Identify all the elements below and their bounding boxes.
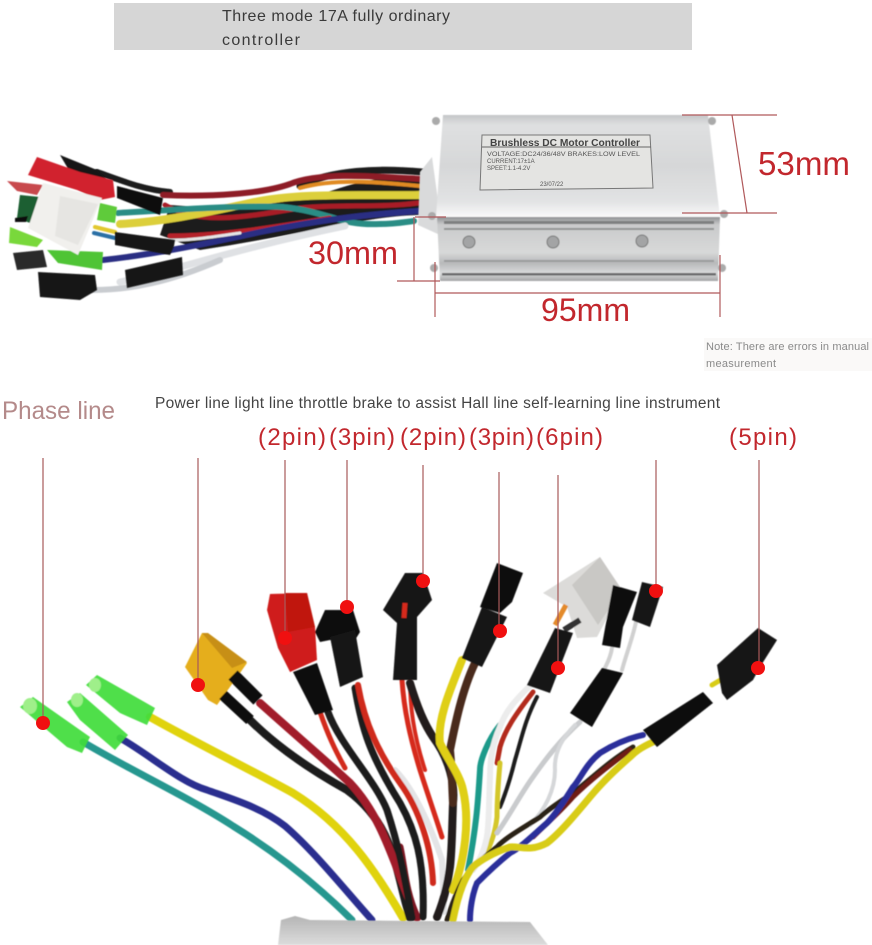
instrument connector: [643, 628, 777, 747]
caption: wire functions: Power line light line throttle brake to assist Hall line self-learning line instrument: [155, 395, 721, 412]
pin count labels: (5pin): [729, 424, 797, 451]
header banner: controller: [222, 32, 301, 49]
self-learning wires: [497, 622, 636, 833]
power connector: [185, 633, 258, 720]
measurement note: [704, 338, 872, 371]
throttle connector: [315, 610, 363, 687]
product label on controller: Brushless DC Motor Controller: [490, 138, 640, 149]
controller base: [278, 916, 548, 945]
pin count labels: (3pin): [469, 424, 534, 451]
measurement note: measurement: [706, 358, 776, 370]
assist wires: [440, 660, 475, 890]
wiring diagram connectors: [20, 557, 777, 945]
dimension: 30mm: [308, 217, 446, 281]
product label on controller: SPEET:1.1-4.2V: [487, 166, 530, 172]
callout dots: [36, 574, 765, 730]
product label on controller: [480, 135, 653, 190]
phase wires: [83, 717, 403, 920]
light connector: [267, 593, 333, 715]
pin count labels: (6pin): [536, 424, 603, 451]
controller box: top photo: [418, 115, 728, 281]
brake wires: [402, 680, 453, 917]
self-learning connectors: [570, 582, 663, 727]
assist connector: [462, 563, 523, 667]
power line wires: [250, 703, 417, 918]
hall connector: [527, 557, 622, 693]
brake connector: [383, 573, 432, 680]
pin count labels: (2pin): [258, 424, 326, 451]
dimension: 30mm: 30mm: [308, 235, 398, 271]
pin count labels: (3pin): [329, 424, 395, 451]
header banner: Three mode 17A fully ordinary: [222, 8, 450, 25]
header banner: [114, 3, 692, 50]
harness connectors: top photo: [7, 155, 183, 300]
callout leader lines: [43, 458, 759, 722]
product label on controller: VOLTAGE:DC24/36/48V BRAKES:LOW LEVEL: [487, 152, 641, 158]
wiring harness: top photo: [92, 170, 422, 290]
dimension: 53mm: [682, 115, 850, 213]
instrument wires: [447, 678, 724, 920]
heading: phase line: Phase line: [2, 397, 115, 425]
hall wires: [468, 683, 537, 870]
product label on controller: 23/07/22: [540, 182, 564, 188]
light line wires: [320, 712, 412, 918]
throttle wires: [355, 685, 444, 917]
phase connectors: [20, 675, 155, 753]
pin count labels: (2pin): [400, 424, 466, 451]
pin count labels: [258, 424, 797, 451]
measurement note: Note: There are errors in manual: [706, 341, 869, 353]
dimension: 95mm: 95mm: [541, 292, 630, 328]
wiring diagram wires: [83, 622, 724, 920]
product label on controller: CURRENT:17±1A: [487, 159, 535, 165]
dimension: 53mm: 53mm: [758, 145, 850, 182]
